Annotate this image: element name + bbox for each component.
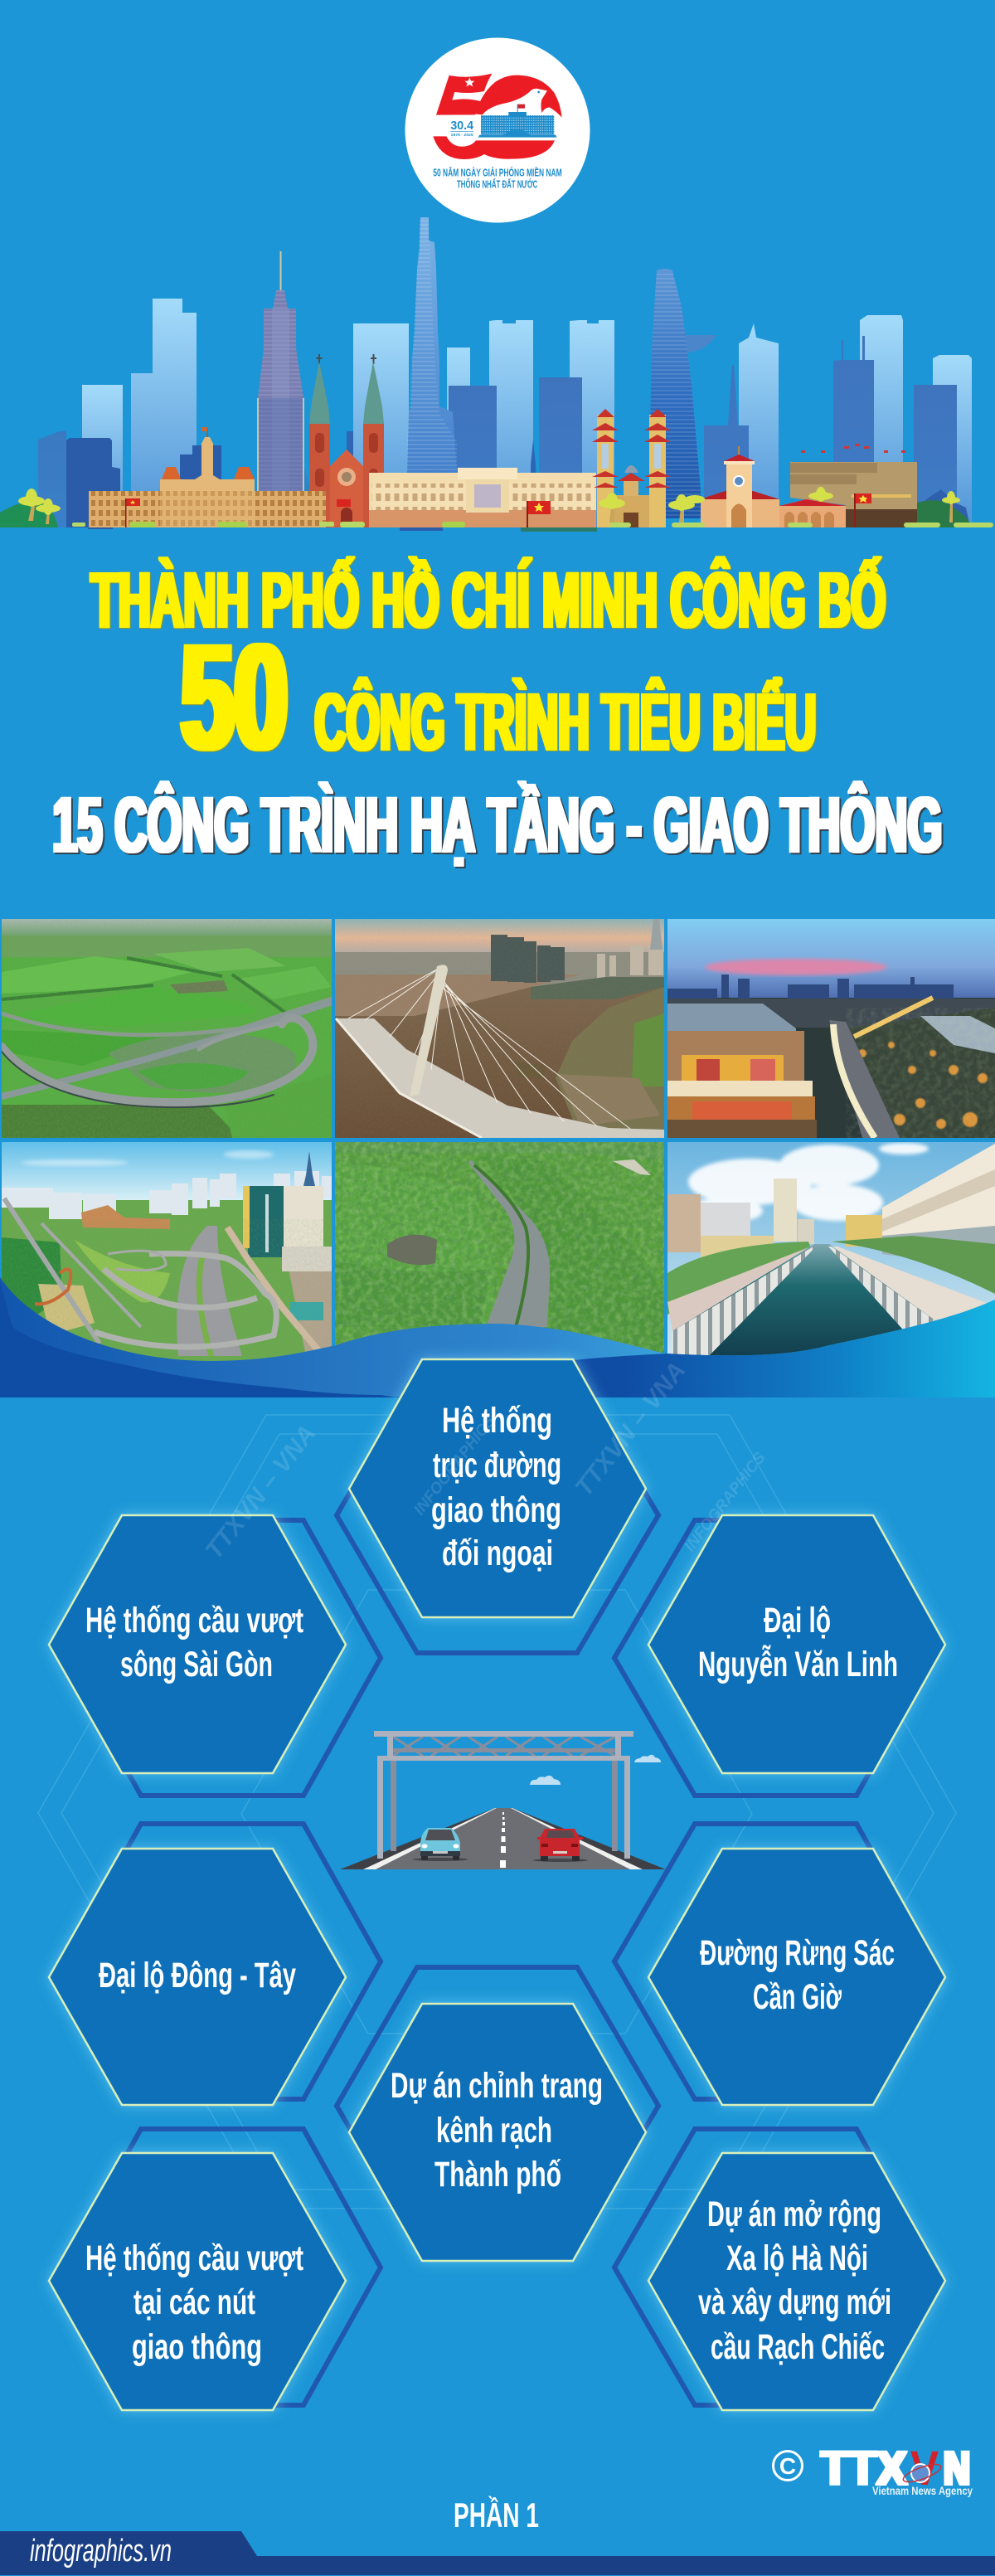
watermarks: TTXVN – VNA [570, 1357, 692, 1501]
gantry [374, 1731, 633, 1859]
logo: 50 years emblem [405, 38, 590, 222]
hexagon: Hệ thống cầu vượt sông Sài Gòn: sông Sài Gòn [120, 1645, 273, 1684]
photo: cable-stayed bridge over river [335, 919, 664, 1138]
faint background hexagon lines [38, 1415, 956, 2209]
hexagon: Dự án chỉnh trang kênh rạch Thành phố: Dự án chỉnh trang [391, 2066, 603, 2106]
blue car [413, 1828, 468, 1861]
footer band [0, 2531, 995, 2575]
hexagon: Đường Rừng Sác Cần Giờ: Cần Giờ [753, 1977, 842, 2017]
hexagon: Hệ thống trục đường giao thông đối ngoại: Hệ thống [442, 1401, 552, 1441]
hexagon: Hệ thống trục đường giao thông đối ngoại: đối ngoại [442, 1533, 553, 1573]
hexagon: Dự án chỉnh trang kênh rạch Thành phố: Thành phố [434, 2155, 561, 2194]
hexagon: Hệ thống trục đường giao thông đối ngoại [349, 1359, 646, 1617]
watermarks [201, 1357, 769, 1564]
logo: 50 years emblem: 30.4 [450, 119, 474, 133]
photo: Nguyen Van Linh avenue at dusk [667, 919, 995, 1138]
footer source text: infographics.vn [30, 2534, 172, 2569]
hexagon: Dự án mở rộng Xa lộ Hà Nội và xây dựng mới cầu Rạch Chiếc: và xây dựng mới [698, 2282, 891, 2322]
red car [533, 1829, 588, 1862]
logo: TTXVN Vietnam News Agency [773, 2442, 973, 2497]
hexagon: Hệ thống cầu vượt tại các nút giao thông: giao thông [132, 2327, 262, 2367]
hexagon: Đại lộ Đông - Tây: Đại lộ Đông - Tây [99, 1956, 296, 1995]
building: City Hall [89, 427, 326, 527]
hexagon: Dự án mở rộng Xa lộ Hà Nội và xây dựng mới cầu Rạch Chiếc: Dự án mở rộng [707, 2194, 881, 2234]
logo: TTXVN Vietnam News Agency: TTX [821, 2442, 907, 2496]
hexagon: Hệ thống cầu vượt tại các nút giao thông: tại các nút [133, 2282, 255, 2322]
road [340, 1808, 666, 1869]
dark blue towers [66, 438, 221, 527]
clouds [530, 1755, 661, 1785]
watermarks: TTXVN – VNA [201, 1420, 322, 1564]
watermarks: INFOGRAPHICS [410, 1412, 499, 1519]
building: Cao Dai temple towers [592, 409, 671, 527]
building: Reunification museum [779, 444, 917, 527]
watermarks: INFOGRAPHICS [681, 1449, 769, 1555]
logo: TTXVN Vietnam News Agency: V [910, 2442, 939, 2496]
hexagon: Hệ thống cầu vượt tại các nút giao thông: Hệ thống cầu vượt [85, 2238, 303, 2278]
hexagon: Hệ thống trục đường giao thông đối ngoại: giao thông [431, 1490, 561, 1530]
hexagon: Đường Rừng Sác Cần Giờ [648, 1849, 945, 2105]
logo: TTXVN Vietnam News Agency: C [779, 2453, 796, 2479]
logo: 50 years emblem: THỐNG NHẤT ĐẤT NƯỚC [457, 178, 537, 191]
hexagon: Đại lộ Đông - Tây [49, 1849, 346, 2105]
logo: 50 years emblem: 50 NĂM NGÀY GIẢI PHÓNG MIỀN NAM [433, 167, 562, 179]
hexagon: Dự án chỉnh trang kênh rạch Thành phố: kênh rạch [436, 2111, 552, 2151]
title number 50: 50 [181, 612, 288, 781]
dark hexagon outlines [64, 1378, 934, 2405]
building: Notre Dame Cathedral [309, 354, 384, 527]
tower: Bitexco [647, 269, 716, 518]
photo: interchange with city towers [2, 1142, 332, 1366]
hexagon: Hệ thống cầu vượt sông Sài Gòn: Hệ thống cầu vượt [85, 1601, 303, 1640]
photo: expressway through rice fields [2, 919, 332, 1138]
hexagon: Dự án mở rộng Xa lộ Hà Nội và xây dựng mới cầu Rạch Chiếc: Xa lộ Hà Nội [726, 2238, 868, 2278]
wave banner [0, 1277, 995, 1397]
hexagon: Hệ thống trục đường giao thông đối ngoại: trục đường [433, 1446, 561, 1485]
logo: TTXVN Vietnam News Agency: Vietnam News Agency [872, 2484, 973, 2497]
building: Ben Thanh Market [701, 446, 779, 527]
logo: TTXVN Vietnam News Agency: N [944, 2442, 970, 2496]
hexagon: Đại lộ Nguyễn Văn Linh [648, 1515, 945, 1773]
hexagon: Đại lộ Nguyễn Văn Linh: Nguyễn Văn Linh [698, 1644, 898, 1684]
hexagon: Dự án mở rộng Xa lộ Hà Nội và xây dựng mới cầu Rạch Chiếc [648, 2153, 945, 2410]
photo: Rung Sac road through mangrove [335, 1142, 664, 1366]
part label: PHẦN 1 [454, 2496, 539, 2535]
building: Independence Palace [369, 468, 596, 527]
background towers light [82, 299, 972, 527]
hexagon: Đại lộ Nguyễn Văn Linh: Đại lộ [764, 1601, 831, 1640]
tower: Landmark 81 [407, 217, 457, 498]
skyline illustration [0, 217, 993, 532]
hexagon: Hệ thống cầu vượt sông Sài Gòn [49, 1515, 346, 1773]
palm trees and green hills [0, 487, 993, 532]
hexagon: Dự án mở rộng Xa lộ Hà Nội và xây dựng mới cầu Rạch Chiếc: cầu Rạch Chiếc [711, 2327, 885, 2367]
logo: 50 years emblem: 1975 - 2025 [451, 133, 473, 137]
tower: Vincom [258, 251, 311, 491]
background towers medium blue [38, 336, 970, 527]
hexagon: Đường Rừng Sác Cần Giờ: Đường Rừng Sác [700, 1933, 895, 1973]
hexagon: Hệ thống cầu vượt tại các nút giao thông [49, 2153, 346, 2410]
hexagon: Dự án chỉnh trang kênh rạch Thành phố [349, 2004, 646, 2261]
photo: canal embankment rendering [667, 1142, 995, 1366]
illustration: highway gantry with two cars [340, 1731, 666, 1869]
